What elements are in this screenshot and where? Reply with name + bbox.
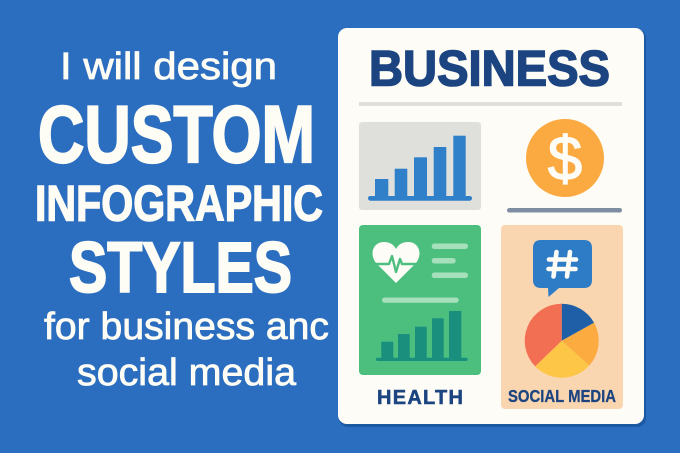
infographic card xyxy=(338,28,646,427)
heading: custom: CUSTOM xyxy=(38,90,315,180)
health bar chart xyxy=(376,311,468,361)
text placeholder lines xyxy=(382,244,468,303)
panel: social media xyxy=(501,225,623,409)
icon: heart with pulse xyxy=(372,242,420,283)
panel: bar chart xyxy=(359,122,481,210)
heading: styles: STYLES xyxy=(69,229,292,308)
icon: dollar coin xyxy=(526,119,604,197)
left headline text block xyxy=(35,46,329,394)
heading: infographic: INFOGRAPHIC xyxy=(35,176,323,232)
panel: health xyxy=(359,225,481,375)
card title: BUSINESS xyxy=(369,40,610,96)
intro line: I will design xyxy=(60,46,277,88)
pie chart xyxy=(525,304,599,378)
icon: dollar coin: $ xyxy=(548,125,582,194)
health label: HEALTH xyxy=(377,387,463,409)
social media label: SOCIAL MEDIA xyxy=(508,386,616,406)
icon: hashtag speech bubble xyxy=(533,240,592,297)
subtitle line two: social media xyxy=(77,352,297,394)
subtitle line one: for business anc xyxy=(44,306,329,348)
